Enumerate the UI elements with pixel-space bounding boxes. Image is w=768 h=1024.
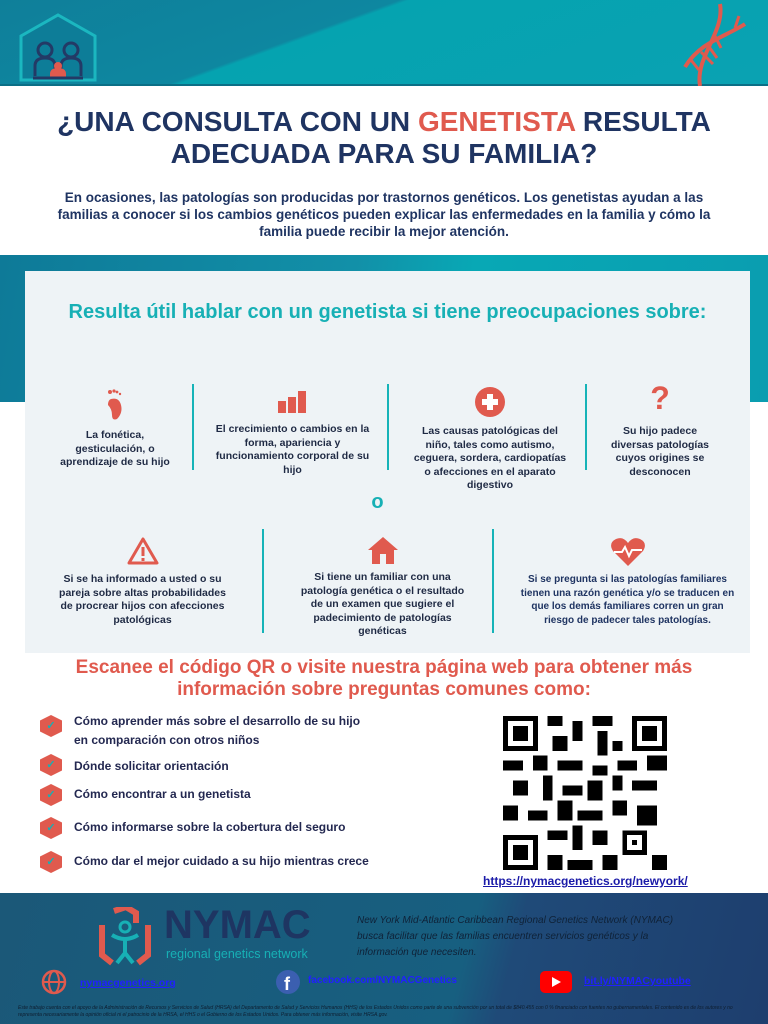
panel: concerns <box>25 271 750 653</box>
link: website <box>42 970 176 994</box>
heading: scan QR: Escanee el código QR o visite nuestra página web para obtener más <box>76 657 692 678</box>
item: speech: gesticulación, o <box>75 442 155 454</box>
funding note: Este trabajo cuenta con el apoyo de la Administración de Recursos y Servicios de Salud (HRSA) del Departamento de Salud y Servicios Humanos (HHS) de los Estados Unidos como parte de una subvención por un total de $840.455 con 0 % financiado con fuentes no gubernamentales. El contenido es de los autores y no representa necesariamente la opinión oficial ni el patrocinio de la HRSA, el HHS o el Gobierno de los Estados Unidos. Para obtener más información, visite HRSA.gov. <box>18 1005 733 1018</box>
icon: dna <box>683 4 746 86</box>
header band <box>0 0 768 86</box>
item: growth <box>216 391 370 476</box>
item: causes: Las causas patológicas del <box>422 425 558 437</box>
checklist: Dónde solicitar orientación <box>74 759 229 773</box>
item: causes: o afecciones en el aparato <box>424 466 556 478</box>
or label: o <box>371 491 384 513</box>
item: heart <box>520 538 734 626</box>
item: causes <box>414 387 566 491</box>
checklist: Cómo aprender más sobre el desarrollo de su hijo <box>74 714 360 728</box>
footer <box>0 893 768 1024</box>
intro text <box>58 190 710 239</box>
item: causes: niño, tales como autismo, <box>426 438 554 450</box>
item: speech: aprendizaje de su hijo <box>60 456 170 468</box>
logo: NYMAC: regional genetics network <box>166 947 308 961</box>
item: speech <box>60 389 170 468</box>
checklist: Cómo informarse sobre la cobertura del seguro <box>74 820 345 834</box>
icon: family house <box>20 13 96 82</box>
item: growth: El crecimiento o cambios en la forma, apariencia y funcionamiento corporal de su hijo <box>216 423 369 476</box>
checklist: Cómo encontrar a un genetista <box>74 787 251 801</box>
checklist: ✓ <box>46 720 56 732</box>
item: warning <box>59 537 226 626</box>
intro text: familia puede recibir la mejor atención. <box>259 224 509 239</box>
item: unknown <box>611 380 709 478</box>
checklist: ✓ <box>46 856 56 868</box>
link: youtube: bit.ly/NYMACyoutube <box>584 975 691 987</box>
heading: scan QR <box>76 657 692 700</box>
checklist: ✓ <box>46 822 56 834</box>
title: ¿UNA CONSULTA CON UN GENETISTA RESULTA <box>57 106 711 137</box>
link: youtube <box>540 971 691 993</box>
item: unknown: Su hijo padece diversas patologías cuyos origines se desconocen <box>611 425 709 478</box>
QR code <box>503 716 667 870</box>
item: causes: ceguera, sordera, cardiopatías <box>414 452 566 464</box>
checklist: en comparación con otros niños <box>74 733 259 747</box>
intro text: En ocasiones, las patologías son producidas por trastornos genéticos. Los genetistas ayudan a las <box>65 190 703 205</box>
checklist: ✓ <box>46 789 56 801</box>
background band <box>0 255 768 402</box>
checklist: Cómo dar el mejor cuidado a su hijo mientras crece <box>74 854 369 868</box>
footer description: New York Mid-Atlantic Caribbean Regional Genetics Network (NYMAC) busca facilitar que las familias encuentren servicios genéticos y la información que necesiten. <box>357 915 673 958</box>
link: facebook: f <box>284 974 291 994</box>
QR url: https://nymacgenetics.org/newyork/ <box>483 874 688 888</box>
item: causes: digestivo <box>467 479 513 491</box>
heading: scan QR: información sobre preguntas comunes como: <box>177 679 591 700</box>
item: family member <box>301 537 464 637</box>
checklist <box>40 714 369 873</box>
link: website: nymacgenetics.org <box>80 977 176 989</box>
link: facebook <box>276 970 457 994</box>
item: family member: Si tiene un familiar con una patología genética o el resultado de un examen que sugiere el padecimiento de patologías genéticas <box>301 571 464 637</box>
logo: NYMAC <box>99 903 311 966</box>
item: unknown: ? <box>650 380 670 416</box>
checklist: ✓ <box>46 759 56 771</box>
link: facebook: facebook.com/NYMACGenetics <box>308 975 457 986</box>
logo: NYMAC: NYMAC <box>164 903 311 947</box>
item: speech: La fonética, <box>86 429 144 441</box>
item: heart: Si se pregunta si las patologías familiares tienen una razón genética y/o se traducen en que los demás familiares corren un gran riesgo de padecer tales patologías. <box>521 574 734 626</box>
title: ADECUADA PARA SU FAMILIA? <box>171 138 597 169</box>
panel heading: Resulta útil hablar con un genetista si tiene preocupaciones sobre: <box>69 301 706 323</box>
intro text: familias a conocer si los cambios genéticos pueden explicar las enfermedades en la familia y cómo la <box>58 207 710 222</box>
title <box>57 106 711 169</box>
item: warning: Si se ha informado a usted o su pareja sobre altas probabilidades de procrear hijos con afecciones patológicas <box>59 573 226 626</box>
